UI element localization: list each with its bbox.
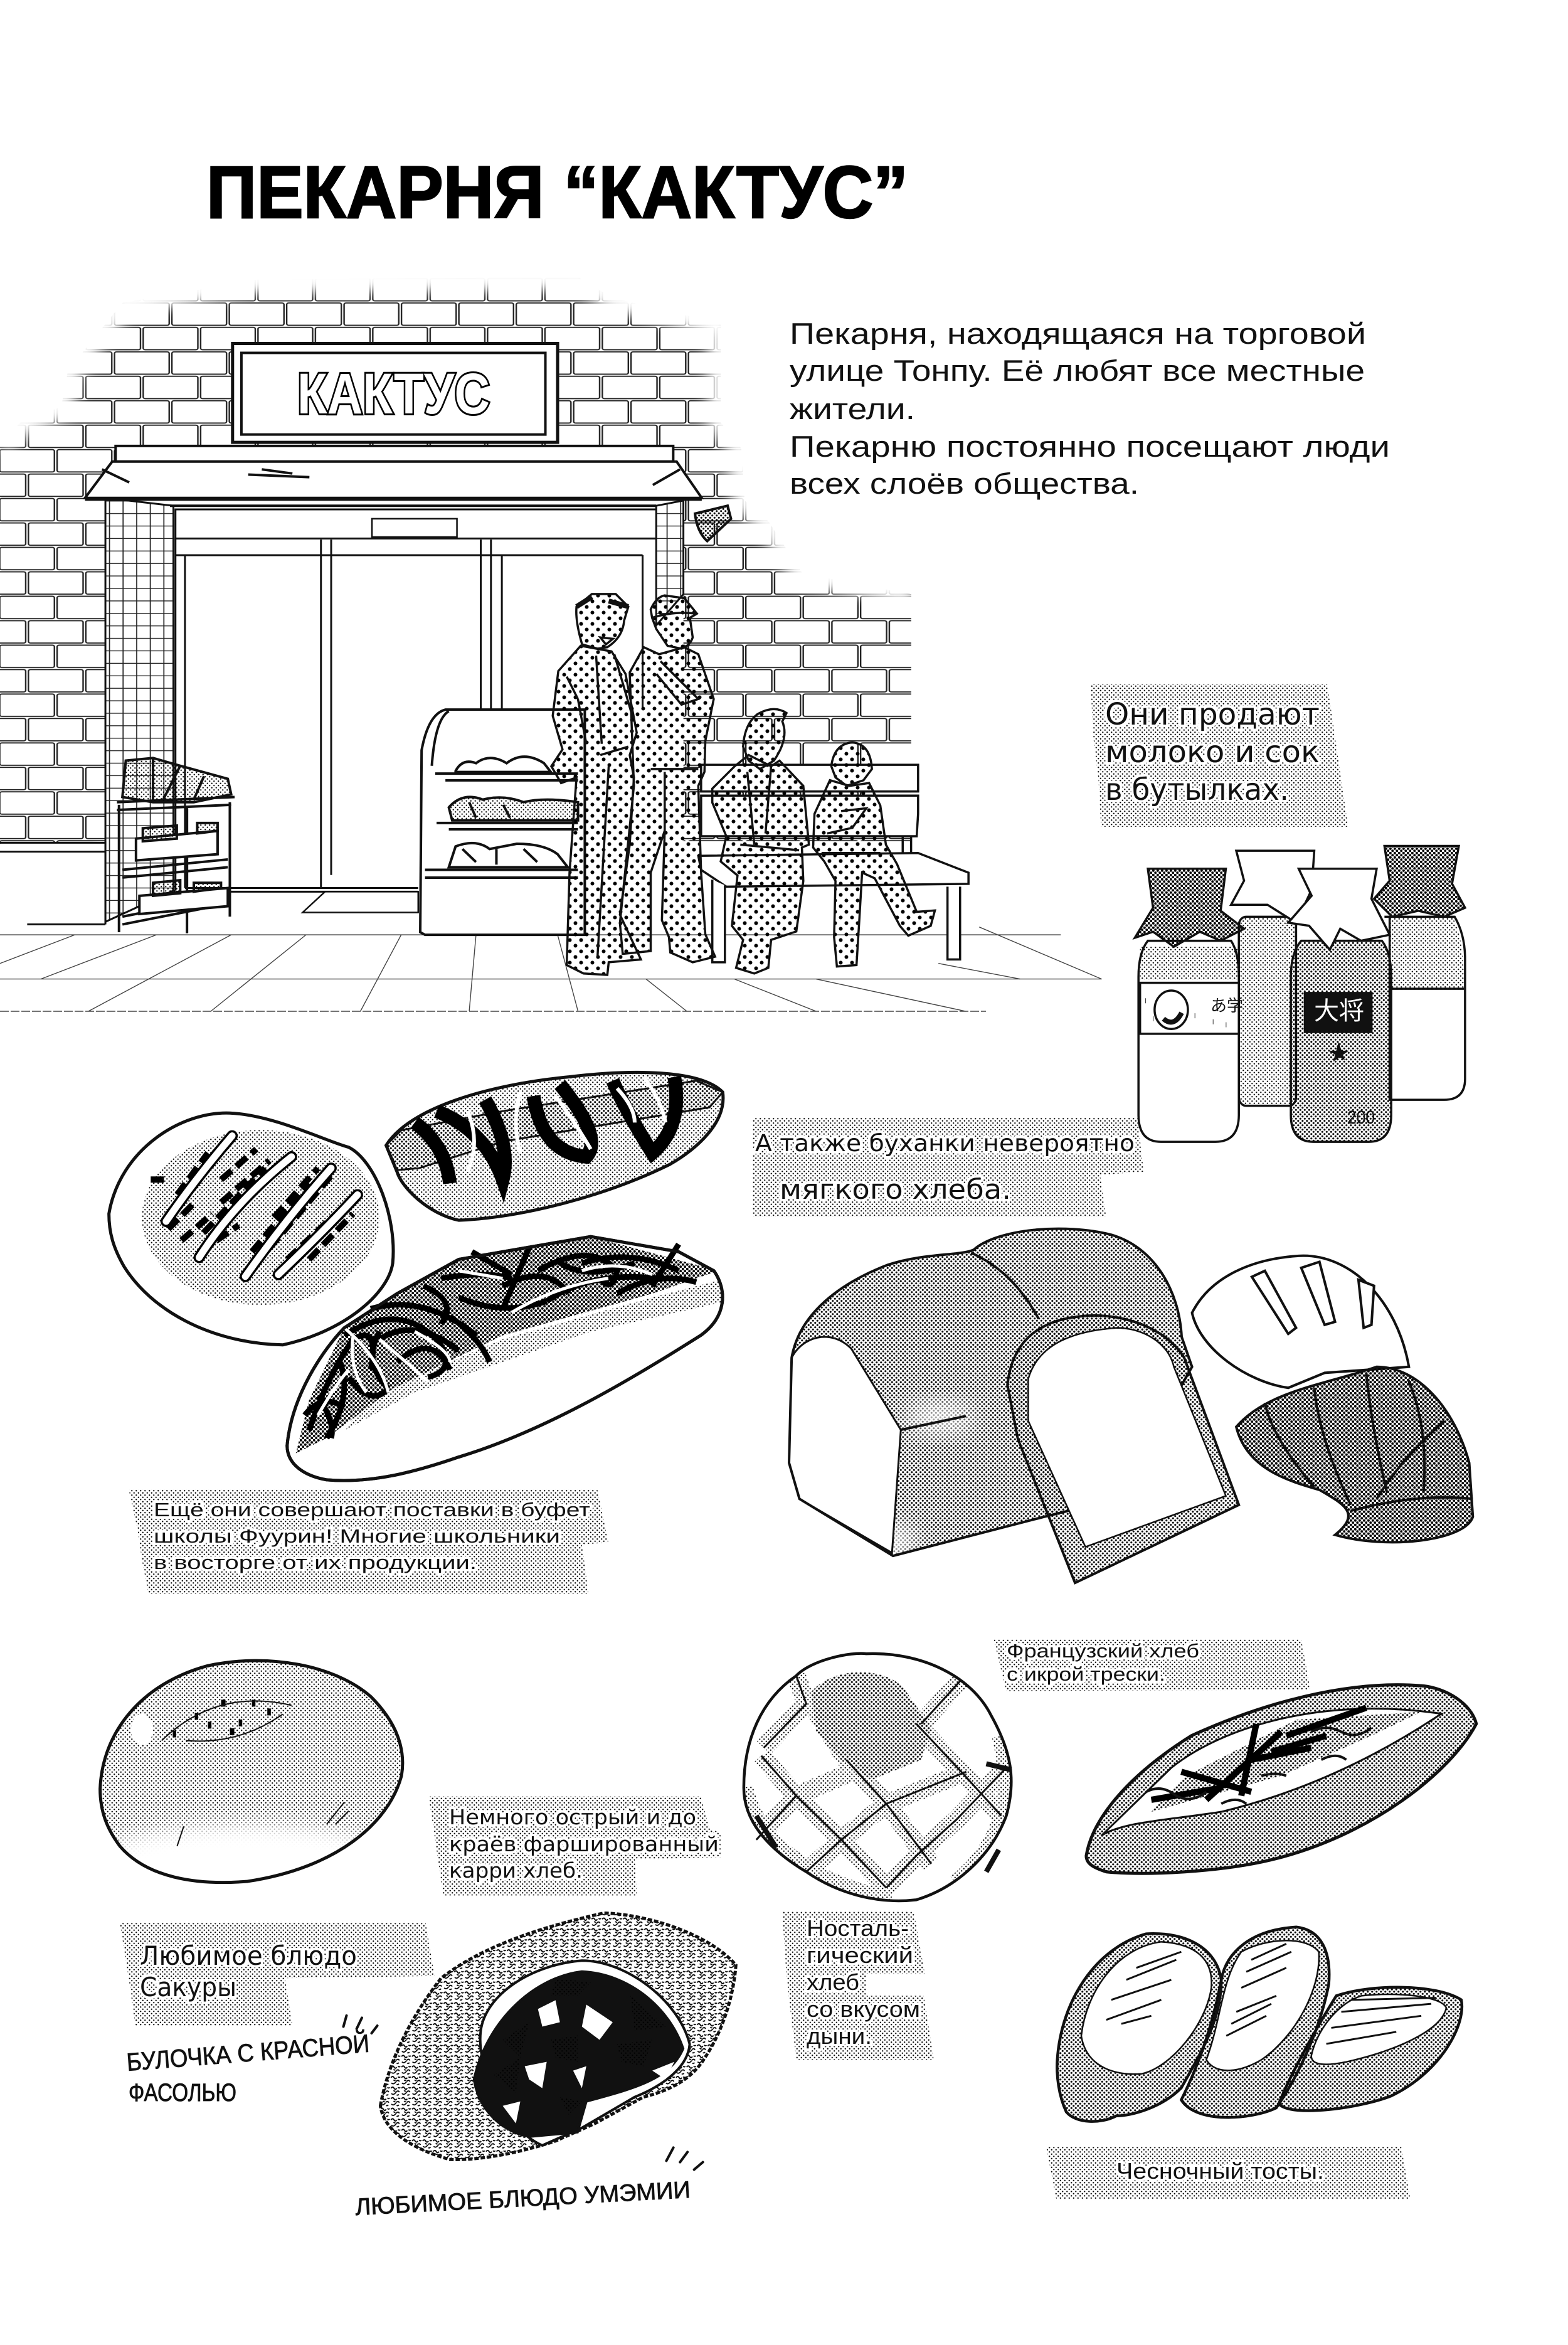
awning	[85, 446, 702, 506]
bottle label texts: 200	[1347, 1107, 1375, 1128]
callout: soft bread: А также буханки невероятно	[755, 1130, 1135, 1157]
callout: melon bread: со вкусом	[807, 1996, 920, 2022]
illustration: garlic toast slices	[1057, 1927, 1462, 2122]
intro text block: Пекарня, находящаяся на торговой	[790, 317, 1366, 350]
callout: garlic toast: Чесночный тосты.	[1116, 2158, 1324, 2184]
callout: milk and juice	[1091, 684, 1348, 827]
callout: melon bread	[782, 1912, 934, 2060]
illustration: bench and customers	[551, 594, 968, 975]
illustration: school-lunch breads	[102, 1072, 727, 1481]
callout: melon bread: гический	[807, 1942, 913, 1968]
callout: cod roe bread: Французский хлеб	[1007, 1640, 1199, 1662]
back bottle right	[1374, 846, 1465, 1100]
callout: soft bread: мягкого хлеба.	[780, 1174, 1011, 1206]
front bottle right with dark label	[1288, 869, 1391, 1142]
callout: Sakura's favourite: Любимое блюдо	[140, 1940, 357, 1971]
callout: school deliveries: школы Фуурин! Многие школьники	[154, 1525, 560, 1547]
toast 2	[1181, 1927, 1329, 2117]
handwritten label: Umemi's favourite: ЛЮБИМОЕ БЛЮДО УМЭМИИ	[354, 2177, 691, 2221]
callout: milk and juice: в бутылках.	[1105, 772, 1289, 807]
callout: garlic toast	[1046, 2147, 1411, 2199]
title: ПЕКАРНЯ “КАКТУС”	[206, 151, 908, 234]
intro text block: Пекарню постоянно посещают люди	[790, 430, 1390, 463]
doorway and entrance frames	[0, 498, 684, 930]
illustration: four bottles	[1135, 846, 1465, 1142]
wall lamp	[695, 506, 731, 541]
callout: soft bread	[753, 1118, 1143, 1217]
callout: cod roe bread	[993, 1640, 1310, 1691]
handwritten label: red bean bun	[125, 2029, 371, 2107]
intro text block: всех слоёв общества.	[790, 467, 1139, 500]
round bun with mayo	[102, 1107, 401, 1351]
illustration: curry bread	[98, 1659, 404, 1885]
sign lettering: КАКТУС	[297, 362, 490, 426]
intro text block: жители.	[790, 392, 915, 425]
bread loaf	[788, 1227, 1194, 1557]
display case with buns	[420, 710, 585, 935]
toast 1	[1057, 1933, 1221, 2122]
callout: Sakura's favourite: Сакуры	[140, 1972, 236, 2002]
bottle label texts: 大将	[1314, 997, 1364, 1025]
callout: milk and juice: Они продают	[1105, 697, 1320, 732]
callout: school deliveries	[129, 1489, 608, 1594]
brick wall	[0, 277, 914, 927]
emphasis ticks	[344, 2016, 703, 2169]
callout: melon bread: Носталь-	[807, 1915, 909, 1941]
intro text block	[790, 317, 1390, 500]
hot dog bread	[386, 1072, 723, 1220]
callout: school deliveries: Ещё они совершают поставки в буфет	[154, 1499, 590, 1521]
illustration: loaf, slice, bread and croissant	[773, 1217, 1473, 1583]
bottle label texts: あ学	[1210, 996, 1243, 1015]
illustration: melon bread	[744, 1654, 1011, 1901]
man in a cap	[620, 595, 715, 962]
bottle label texts	[1210, 996, 1375, 1128]
back bottle left	[1231, 851, 1314, 1106]
seated child	[813, 742, 935, 967]
pavement	[0, 927, 1101, 1011]
intro text block: улице Тонпу. Её любят все местные	[790, 354, 1365, 387]
shop sign	[233, 344, 558, 442]
standing man	[551, 594, 641, 975]
callout: school deliveries: в восторге от их продукции.	[154, 1551, 477, 1573]
callout: melon bread: дыни.	[807, 2023, 872, 2049]
noodle bread	[287, 1236, 727, 1481]
front bottle left with smile label	[1135, 869, 1244, 1142]
bread slice	[1007, 1316, 1239, 1583]
handwritten label: red bean bun: ФАСОЛЬЮ	[129, 2079, 236, 2107]
toast 3	[1279, 1987, 1462, 2111]
illustration: bitten red bean bun	[380, 1913, 736, 2159]
callout: cod roe bread: с икрой трески.	[1007, 1663, 1165, 1685]
callout: curry bread	[429, 1797, 721, 1895]
callout: curry bread: карри хлеб.	[449, 1858, 583, 1883]
scored bread roll	[1192, 1256, 1409, 1388]
callout: Sakura's favourite	[120, 1923, 435, 2026]
illustration: bakery storefront with customers	[0, 277, 1101, 1011]
callout: curry bread: краёв фаршированный	[449, 1832, 719, 1856]
bread cart	[117, 758, 235, 933]
seated woman	[712, 709, 809, 974]
callout: milk and juice: молоко и сок	[1105, 735, 1320, 770]
handwritten label: red bean bun: БУЛОЧКА С КРАСНОЙ	[125, 2029, 371, 2076]
callout: melon bread: хлеб	[807, 1969, 859, 1995]
illustration: French bread with cod roe	[1086, 1685, 1476, 1873]
callout: curry bread: Немного острый и до	[449, 1805, 696, 1829]
croissant	[1236, 1367, 1473, 1542]
bench	[698, 765, 968, 962]
